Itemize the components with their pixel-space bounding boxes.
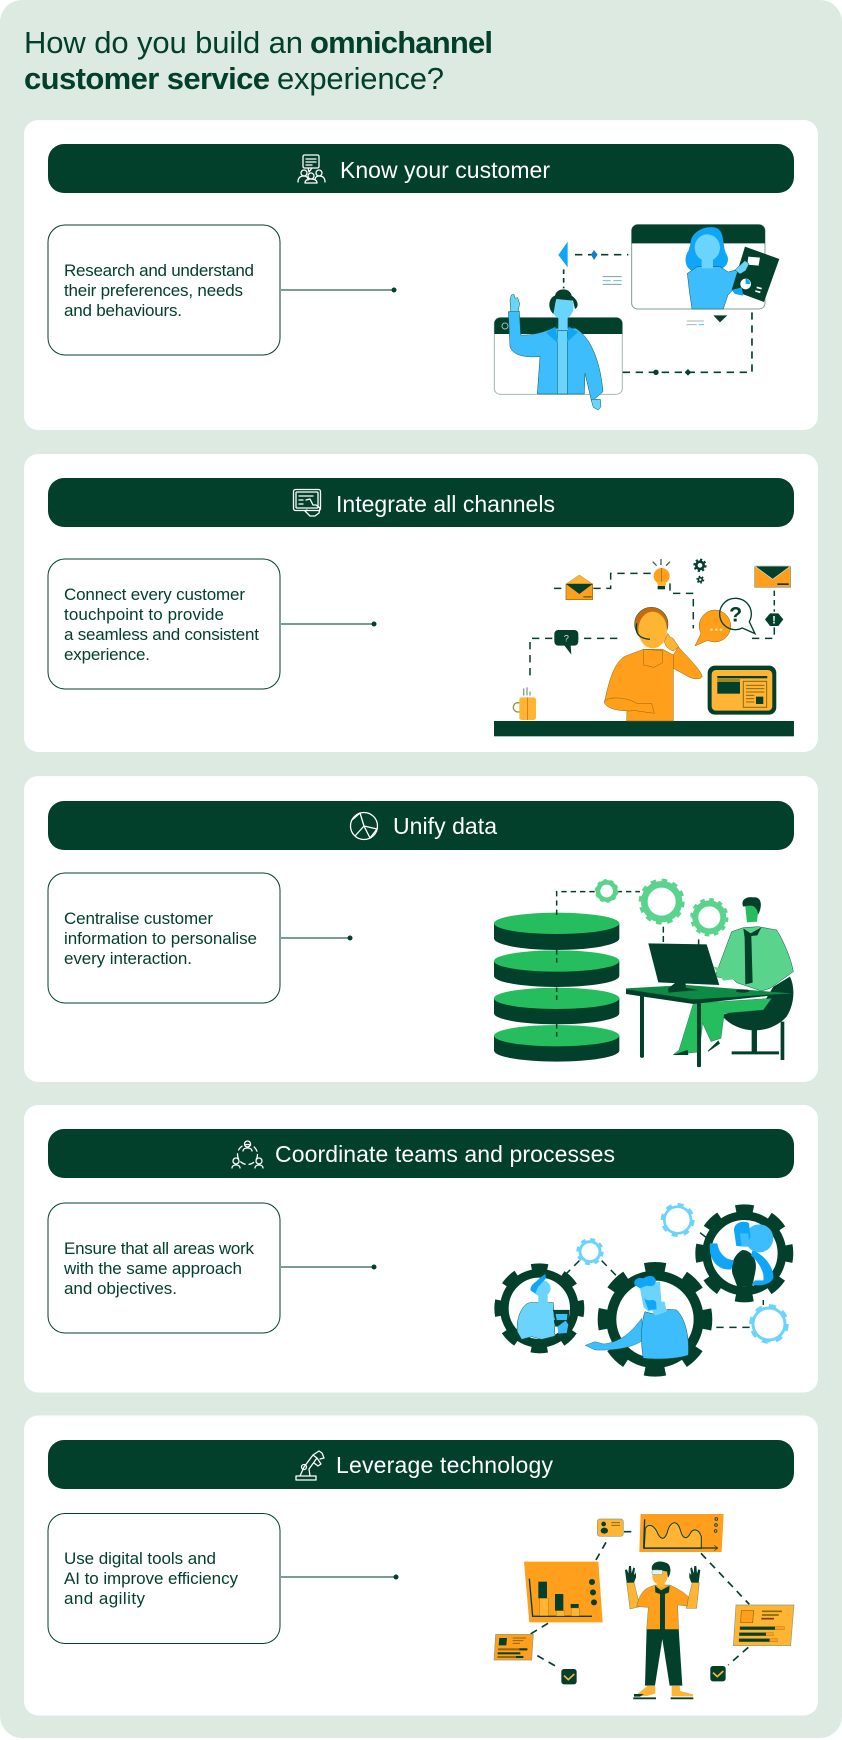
heading bar: unify data <box>48 801 794 850</box>
icon: right gear with person <box>699 1208 789 1298</box>
illustration: team members inside gears <box>499 1204 789 1371</box>
left data card <box>494 1634 533 1660</box>
text block: and agility <box>64 1589 146 1608</box>
text block: and behaviours. <box>64 301 182 320</box>
text block <box>48 1514 280 1644</box>
panel: unify data <box>24 776 818 1082</box>
icon: small light gears <box>578 1204 787 1342</box>
icon: robotic arm <box>296 1451 324 1480</box>
illustration: support agent with channels: ! <box>772 614 776 626</box>
connector <box>281 622 376 626</box>
illustration: support agent with channels: ? <box>564 633 569 643</box>
text block: every interaction. <box>64 949 192 968</box>
heading text: Unify data <box>393 813 497 839</box>
connector <box>281 936 352 940</box>
text block: Research and understand <box>64 261 254 280</box>
icon: centre gear with person <box>585 1268 707 1371</box>
panel: integrate all channels <box>24 454 818 752</box>
chart: bar graph panel <box>524 1562 603 1622</box>
text block: AI to improve efficiency <box>64 1569 238 1588</box>
heading text: Know your customer <box>340 157 550 183</box>
connector <box>281 1574 398 1580</box>
panel: coordinate teams and processes <box>24 1105 818 1392</box>
text block: with the same approach <box>63 1259 242 1278</box>
text block: Use digital tools and <box>64 1549 216 1568</box>
title: customer service <box>24 61 270 96</box>
text block: Connect every customer <box>64 585 245 604</box>
icon: customer group with speech bubble <box>298 155 325 183</box>
icon: data pie <box>350 812 378 840</box>
illustration: support agent with channels <box>494 559 794 736</box>
heading bar: know your customer <box>48 144 794 193</box>
title: omnichannel <box>310 25 493 60</box>
text block <box>48 1203 280 1333</box>
text block: and objectives. <box>64 1279 177 1298</box>
text block: touchpoint to provide <box>64 605 224 624</box>
illustration: database and analyst at desk <box>494 880 793 1067</box>
icon: left gear with person <box>499 1268 580 1349</box>
text block: Ensure that all areas work <box>64 1239 254 1258</box>
heading bar: integrate all channels <box>48 478 794 527</box>
chart: line graph panel <box>639 1514 724 1552</box>
text block <box>48 873 280 1003</box>
heading text: Integrate all channels <box>336 491 555 517</box>
panel: know your customer <box>24 120 818 430</box>
right data card <box>733 1605 794 1646</box>
icon: check boxes <box>561 1666 726 1684</box>
heading bar: leverage technology <box>48 1440 794 1489</box>
person with raised hands <box>625 1561 700 1699</box>
heading text: Coordinate teams and processes <box>275 1141 615 1167</box>
title <box>24 25 493 96</box>
connector <box>281 288 396 292</box>
icon: team cycle <box>232 1141 263 1168</box>
text block <box>48 225 280 355</box>
text block: Centralise customer <box>64 909 213 928</box>
icon: small gears <box>694 560 706 583</box>
heading text: Leverage technology <box>336 1452 554 1478</box>
panel: leverage technology <box>24 1416 818 1716</box>
illustration: support agent with channels: ? <box>729 602 742 626</box>
icon: gears <box>596 880 727 935</box>
illustration: two customers in video windows <box>494 225 779 410</box>
title: experience? <box>277 61 444 96</box>
heading bar: coordinate teams and processes <box>48 1129 794 1178</box>
text block: a seamless and consistent <box>64 625 259 644</box>
small profile card <box>597 1519 623 1536</box>
connector <box>281 1264 376 1270</box>
illustration: person with digital dashboards <box>494 1514 794 1699</box>
text block: experience. <box>64 645 150 664</box>
text block <box>48 559 280 689</box>
chart: database stack <box>494 913 619 1062</box>
text block: their preferences, needs <box>64 281 243 300</box>
icon: touch screen <box>294 490 320 516</box>
text block: information to personalise <box>64 929 257 948</box>
title: How do you build an <box>24 25 303 60</box>
